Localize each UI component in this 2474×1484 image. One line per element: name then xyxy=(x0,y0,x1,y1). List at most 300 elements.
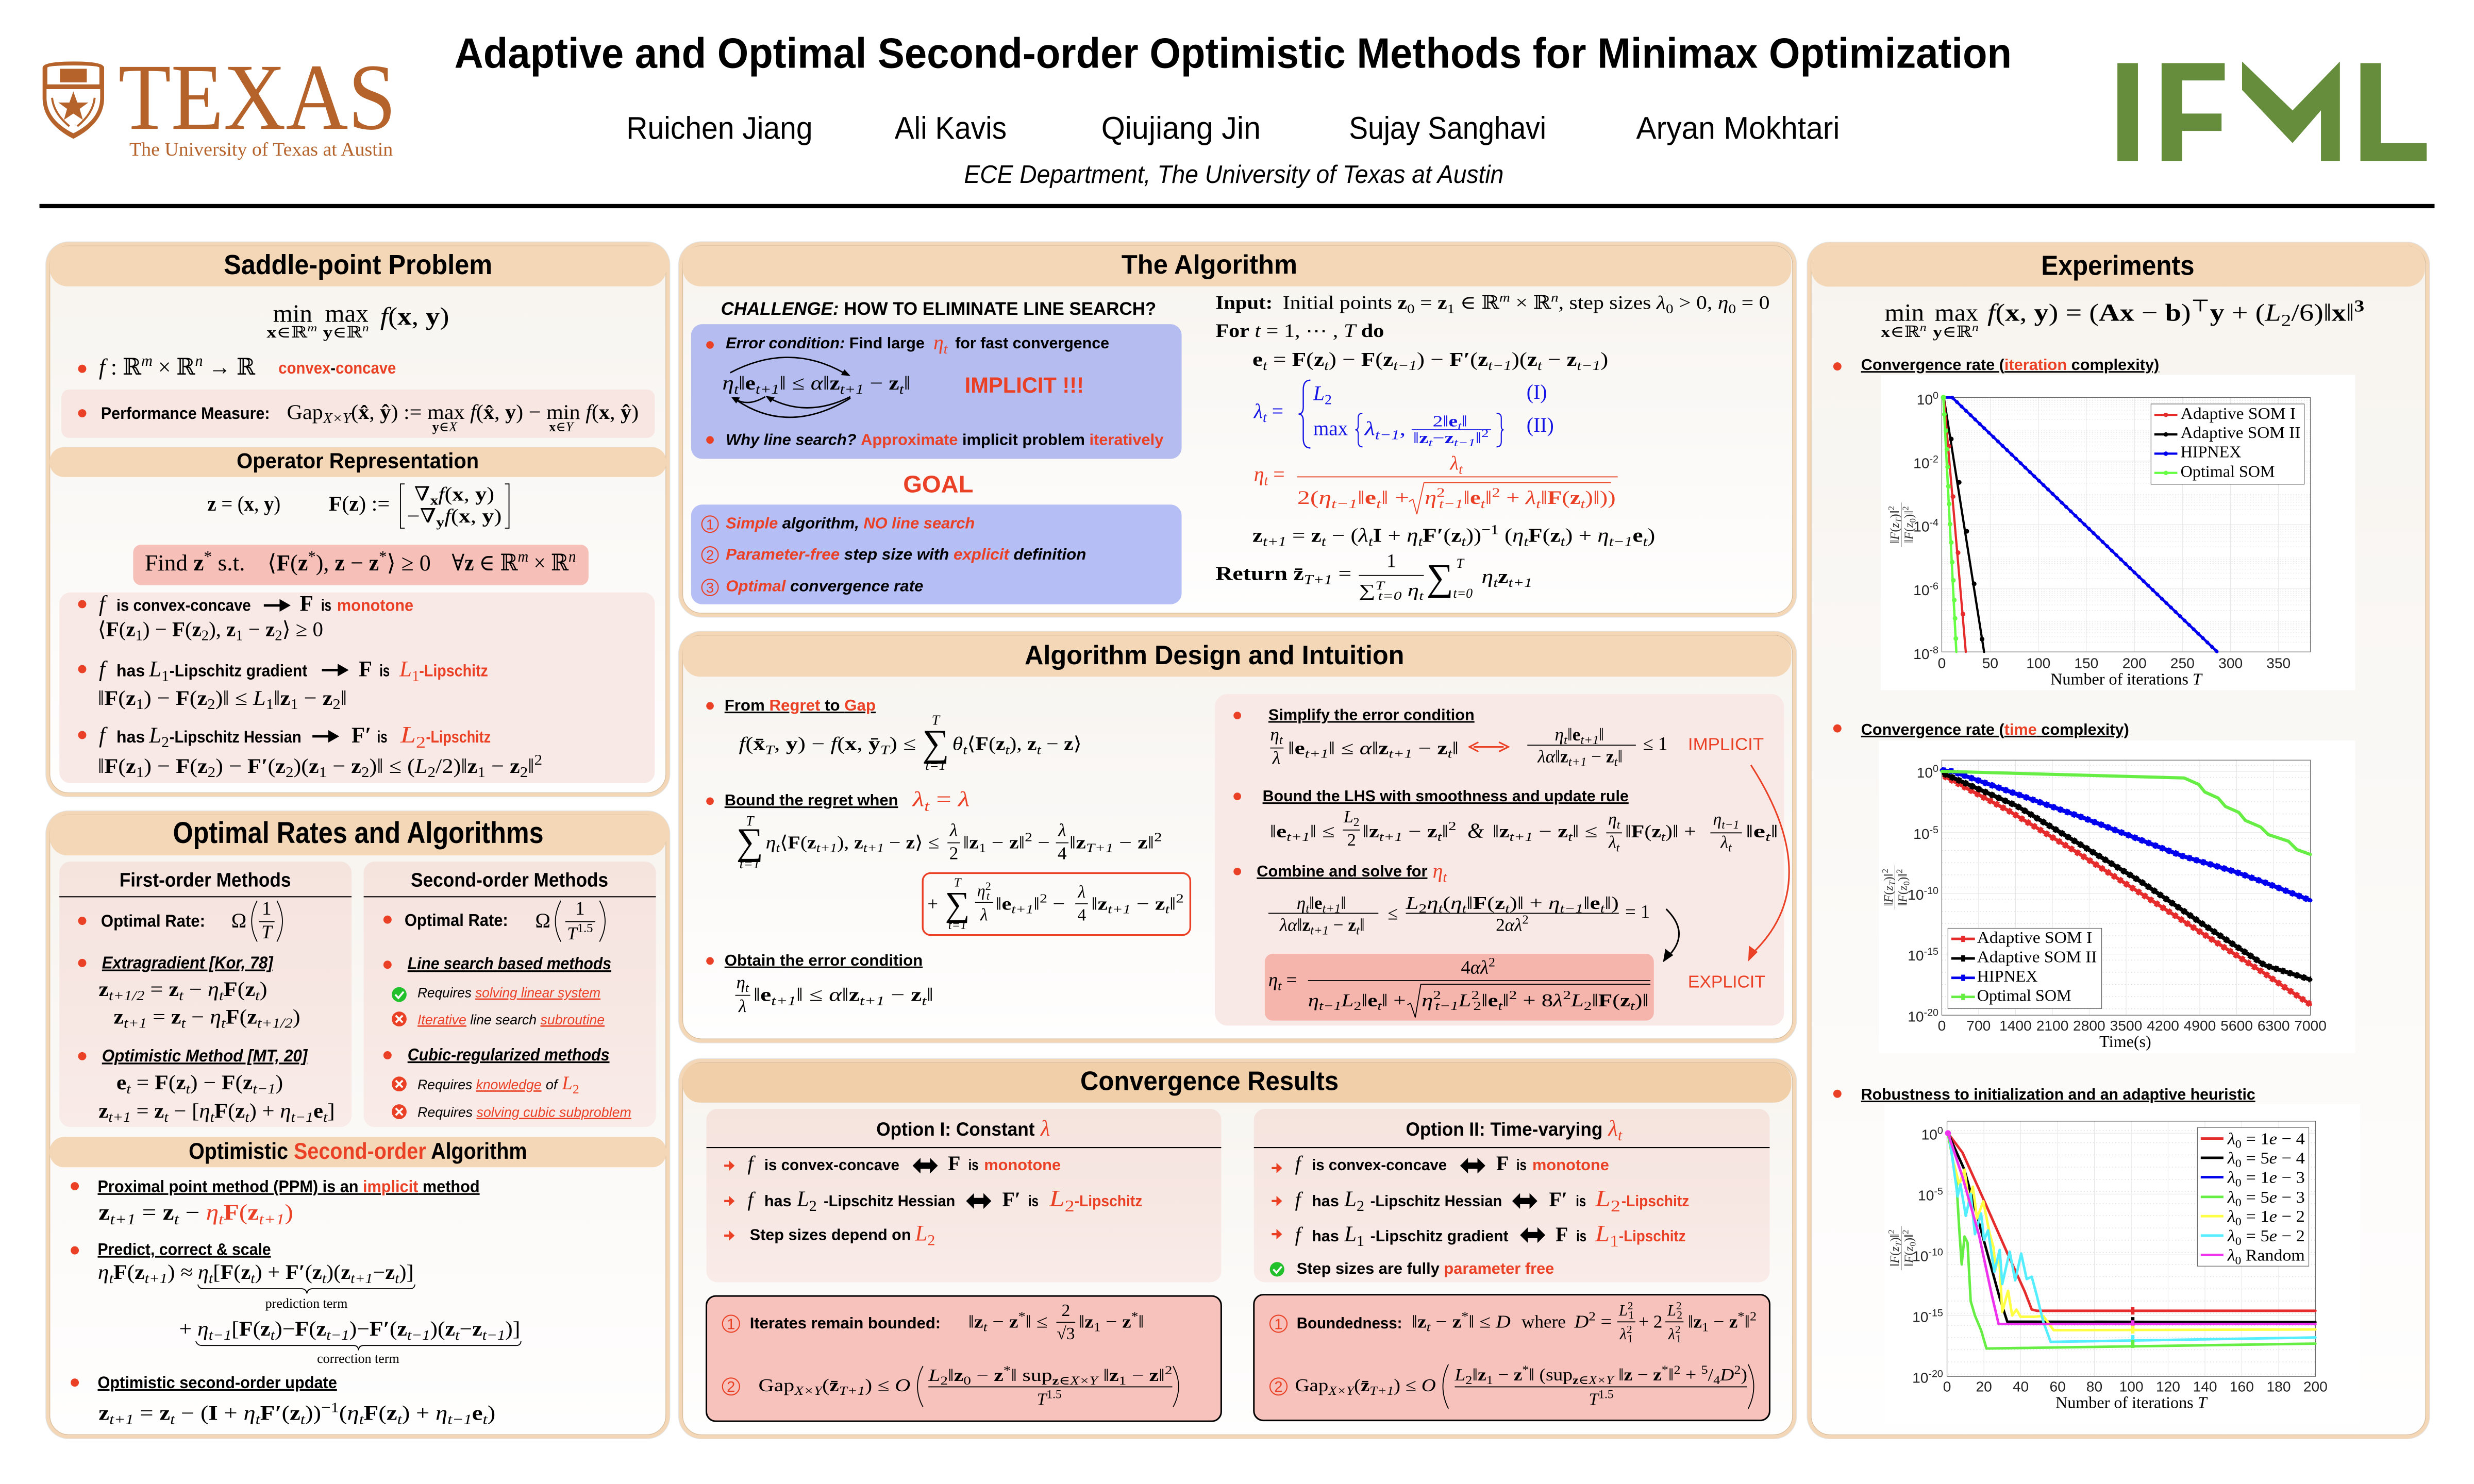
callout: red boxed sum: 4 xyxy=(1077,906,1086,925)
series: lambda0 Random xyxy=(1948,1133,2315,1324)
algorithm: return: ∑ Tt=0 η t xyxy=(1359,579,1425,603)
sub-panel: Second-order Methods: of xyxy=(546,1077,559,1092)
box: Option II results: ‖z1 − z*‖2 xyxy=(1688,1310,1757,1335)
step: combine and solve: ηt‖et+1‖ xyxy=(1297,893,1346,916)
property: L1 Lipschitz gradient: L1 xyxy=(148,657,169,685)
algorithm: lambda_t cases: 2‖ e t‖ xyxy=(1433,412,1467,432)
property: monotone: F xyxy=(300,592,313,616)
step: combine and solve: L 2 η t( η t‖F ( z t)‖ + η t−1 ‖e t‖) xyxy=(1405,893,1619,916)
sub-panel: First-order Methods: Optimal Rate: xyxy=(101,912,205,931)
bullet: f mapping: convex-concave xyxy=(278,359,396,377)
item: predict correct and scale: ηt[F(zt) + F′(zt)(zt+1−zt)] xyxy=(198,1261,414,1287)
band: Algorithm Design heading xyxy=(683,635,1791,677)
algorithm: return: t=0 xyxy=(1453,586,1473,601)
panel: Optimal Rates and Algorithms xyxy=(48,813,668,1437)
chart: time complexity xyxy=(1879,740,2355,1053)
band: Experiments heading: Experiments xyxy=(2041,250,2195,281)
algorithm: return: T xyxy=(1457,556,1465,571)
panel: Algorithm Design and Intuition xyxy=(681,633,1795,1041)
box: Option I results xyxy=(707,1296,1221,1421)
box: error condition xyxy=(691,324,1182,459)
band: Saddle-point Problem heading xyxy=(50,246,666,286)
sub-panel: Option II: L 2 xyxy=(1595,1185,1620,1215)
formula: saddle point objective: f(x, y) xyxy=(380,302,449,330)
box: find z star xyxy=(133,545,589,585)
legend: λ0 = 1 e − 3 xyxy=(2227,1168,2305,1189)
property: L2 Lipschitz Hessian: has xyxy=(116,728,145,746)
bullet: iteration complexity: Convergence rate (iteration complexity) xyxy=(1861,356,2159,374)
series: Adaptive SOM I xyxy=(1944,397,1966,652)
box: Option II results: L21 xyxy=(1618,1300,1634,1321)
axis labels: 0 xyxy=(1938,1018,1946,1034)
algorithm: return: 1 xyxy=(1386,550,1396,571)
step: bound the LHS: λt xyxy=(1608,833,1620,854)
legend xyxy=(2151,404,2304,484)
axis labels: 0 xyxy=(1943,1378,1951,1394)
step: bound the LHS: ηt−1 xyxy=(1713,810,1739,832)
series: HIPNEX xyxy=(1942,397,2217,652)
box: Option I results: T1.5 xyxy=(1037,1388,1062,1409)
authors: Qiujiang Jin xyxy=(1101,110,1261,145)
formula: operator F: −∇ yf(x , y ) xyxy=(407,505,502,530)
property: L2 Lipschitz Hessian: is xyxy=(377,728,388,746)
legend: Optimal SOM xyxy=(1977,986,2071,1005)
series: lambda0 = 5e-3 xyxy=(1948,1133,2315,1348)
box: explicit eta_t formula: 4αλ2 xyxy=(1461,955,1495,978)
legend: λ0 = 1 e − 2 xyxy=(2227,1207,2305,1228)
axis labels: ‖F(z0)‖2 xyxy=(1900,1230,1918,1267)
axis labels: Number of iterations T xyxy=(2055,1393,2208,1411)
algorithm: lambda_t cases: ‖ z t− z t−1 ‖ 2 xyxy=(1413,427,1489,449)
algorithm: lambda_t cases: (II) xyxy=(1527,414,1554,436)
formula: operator F: z = (x, y) xyxy=(208,492,280,516)
box: Option I results: L 2 ‖z 0 − z * ‖ sup z ∈ X×Y ‖ z 1 − z ‖ 2 xyxy=(928,1364,1172,1388)
axis labels: 180 xyxy=(2267,1378,2291,1394)
box: Option I results: √3 xyxy=(1057,1324,1075,1343)
bullet: f mapping: f : ℝm × ℝn → ℝ xyxy=(99,351,256,380)
axis labels xyxy=(1886,1125,2328,1411)
box: Option II results: Boundedness: xyxy=(1297,1314,1402,1332)
step: bound the LHS: ‖e t+1 ‖ ≤ xyxy=(1270,821,1335,845)
algorithm: eta_t xyxy=(1254,453,1618,514)
sub-panel: Option I: f xyxy=(747,1188,756,1211)
axis labels: 100 xyxy=(1917,390,1938,408)
sub-panel: Option II: f xyxy=(1295,1188,1303,1211)
step: simplify the error condition: ηt‖et+1‖ xyxy=(1555,724,1604,748)
item: predict correct and scale: + ηt−1 [F(zt)− F(zt−1 )− F′ (zt−1 )(zt−zt−1 )] xyxy=(179,1318,520,1344)
property: L2 Lipschitz Hessian: -Lipschitz xyxy=(426,728,491,746)
axis labels: 3500 xyxy=(2110,1018,2142,1034)
sub-panel: Option II xyxy=(1254,1109,1769,1282)
formula: experiment objective: y ∈ℝ n xyxy=(1933,321,1979,341)
algorithm: eta_t: ηt = xyxy=(1254,463,1285,489)
formula: saddle point objective: x ∈ℝ m xyxy=(266,322,317,341)
item: proximal point method: Proximal point method (PPM) is an implicit method xyxy=(97,1177,480,1196)
step: simplify the error condition: ‖e t+1 ‖ ≤ α ‖z t+1 − z t‖ xyxy=(1288,738,1459,761)
step: from regret to gap xyxy=(706,697,1082,773)
step: bound the regret: ‖z 1 − z ‖2 − xyxy=(963,831,1050,855)
sub-panel: Option II: -Lipschitz gradient xyxy=(1370,1227,1509,1245)
property: monotone xyxy=(78,592,413,644)
axis labels: 0 xyxy=(1938,655,1946,671)
sub-panel: Option II: is xyxy=(1576,1192,1586,1210)
legend xyxy=(2197,1127,2309,1267)
box: Option II results: λ21 xyxy=(1619,1323,1633,1345)
sub-panel: Second-order Methods: 1 xyxy=(575,898,584,919)
axis labels: 10-6 xyxy=(1913,581,1938,598)
box: goals: 3 xyxy=(706,580,714,596)
legend: λ0 = 5 e − 3 xyxy=(2227,1188,2305,1209)
sub-panel: Option II: -Lipschitz xyxy=(1622,1192,1689,1210)
step: bound the regret xyxy=(706,787,1162,871)
logo: IFML xyxy=(2117,61,2427,161)
formula: saddle point objective xyxy=(266,299,449,341)
box: Option II results: L 2‖z1 − z*‖ (sup z∈ X×Y ‖z − z*‖2 + 5/4D 2) xyxy=(1454,1363,1747,1387)
sub-panel: Option I: is xyxy=(1028,1192,1039,1210)
axis labels: 10-8 xyxy=(1913,645,1938,662)
step: from regret to gap: From Regret to Gap xyxy=(725,697,876,714)
box: performance measure xyxy=(61,390,655,438)
axis labels: 50 xyxy=(1982,655,1998,671)
affiliation: ECE Department, The University of Texas at Austin xyxy=(964,161,1503,189)
sub-panel: Second-order Methods: Iterative line search subroutine xyxy=(417,1012,605,1027)
panel: Convergence Results xyxy=(681,1061,1795,1437)
panel: Experiments xyxy=(1809,244,2428,1437)
axis labels: 350 xyxy=(2266,655,2291,671)
property: L2 Lipschitz Hessian: L 2 xyxy=(400,721,426,751)
sub-panel: Second-order Methods: T1.5 xyxy=(567,921,593,943)
axis labels: 40 xyxy=(2013,1378,2029,1394)
box: Option II results: D 2 = xyxy=(1574,1310,1612,1332)
property: L1 Lipschitz gradient: f xyxy=(99,657,108,682)
sub-panel: First-order Methods: 1 xyxy=(262,898,272,919)
step: combine and solve: ≤ xyxy=(1388,903,1398,924)
chart: iteration complexity xyxy=(1881,375,2355,690)
step: combine and solve: = 1 xyxy=(1625,901,1650,922)
property: L1 Lipschitz gradient: ‖F(z1) − F(z2)‖ ≤ L1‖z1 − z2‖ xyxy=(98,686,347,713)
panel: The Algorithm xyxy=(681,244,1795,615)
band: Optimistic Second-order Algorithm: Optimistic Second-order Algorithm xyxy=(189,1139,527,1164)
algorithm: lambda_t cases: (I) xyxy=(1527,381,1547,403)
step: bound the regret: 4 xyxy=(1058,843,1067,863)
title: Adaptive and Optimal Second-order Optimistic Methods for Minimax Optimization xyxy=(455,29,2012,77)
sub-panel: Option II: F xyxy=(1496,1152,1509,1175)
step: from regret to gap: f(x̄ T , y ) − f(x , ȳ T ) ≤ xyxy=(739,733,916,757)
step: obtain error condition: ‖ e t+1 ‖ ≤ α ‖ z t+1 − z t‖ xyxy=(754,984,933,1008)
step: bound the LHS: λt xyxy=(1720,833,1732,854)
step: simplify the error condition: IMPLICIT xyxy=(1688,735,1764,754)
sub-panel: Option II: F xyxy=(1556,1223,1568,1246)
formula: experiment objective: min xyxy=(1885,299,1924,326)
legend: λ0 = 5 e − 2 xyxy=(2227,1226,2305,1247)
sub-panel: Option II: has xyxy=(1312,1192,1339,1210)
step: bound the LHS: ‖F (z t)‖ + xyxy=(1625,821,1696,845)
sub-panel: Option I: L2 xyxy=(796,1187,817,1215)
sub-panel: Option I: is convex-concave xyxy=(764,1156,899,1174)
band: Optimal Rates heading xyxy=(50,815,666,855)
arrow: black curved to explicit formula xyxy=(1663,909,1679,962)
legend: Optimal SOM xyxy=(2181,462,2275,480)
sub-panel: Option I: is xyxy=(968,1156,979,1174)
sub-panel: First-order Methods: T xyxy=(261,921,273,942)
sub-panel: First-order Methods xyxy=(59,862,352,1127)
axis labels: 100 xyxy=(2026,655,2050,671)
step: bound the LHS: ‖z t+1 − z t‖ ≤ xyxy=(1493,821,1597,845)
algorithm: lambda_t cases xyxy=(1253,380,1554,449)
sub-panel: Option II: F′ xyxy=(1549,1188,1567,1211)
sub-panel: Second-order Methods: Ω xyxy=(535,909,550,932)
sub-panel: Option I: monotone xyxy=(984,1156,1061,1174)
box: error condition: for fast convergence xyxy=(955,334,1109,352)
series: Optimal SOM xyxy=(1941,395,1958,652)
legend: Adaptive SOM II xyxy=(1977,947,2097,966)
axis labels: 700 xyxy=(1966,1018,1991,1034)
box: explicit eta_t formula xyxy=(1265,954,1654,1021)
sub-panel: Second-order Methods: Requires solving cubic subproblem xyxy=(417,1104,631,1120)
band: Operator Representation xyxy=(49,447,666,477)
sub-panel: Option I: -Lipschitz Hessian xyxy=(824,1192,955,1210)
step: combine and solve: 2αλ2 xyxy=(1496,913,1529,935)
legend: Adaptive SOM I xyxy=(2181,404,2296,423)
sub-panel: Option I: λ xyxy=(1040,1117,1050,1141)
box: goals: Optimal convergence rate xyxy=(726,577,923,595)
property: L2 Lipschitz Hessian xyxy=(78,721,542,781)
box: goals: 1 xyxy=(706,516,714,532)
box: error condition: Error condition: Find large xyxy=(726,334,925,352)
sub-panel: Second-order Methods: Cubic-regularized methods xyxy=(408,1045,610,1065)
algorithm: lambda_t cases: λt = xyxy=(1253,400,1283,426)
box: Option II results: Gap X×Y (z̄T+1 ) ≤ O xyxy=(1295,1375,1436,1398)
step: bound the regret: t=1 xyxy=(740,855,760,871)
axis labels: ‖F(z0)‖2 xyxy=(1900,506,1918,543)
axis labels: Number of iterations T xyxy=(2050,669,2203,688)
axis labels: 10-10 xyxy=(1908,885,1938,903)
step: bound the regret: λ xyxy=(949,820,958,840)
legend: λ0 Random xyxy=(2227,1246,2305,1267)
box: Option I results: Gap X×Y (z̄ T+1 ) ≤ O xyxy=(759,1375,910,1398)
step: bound the regret: T xyxy=(746,813,755,829)
box: performance measure: Performance Measure: xyxy=(101,404,270,423)
property: L2 Lipschitz Hessian: L2 xyxy=(148,723,169,751)
axis labels: ‖F(z0)‖2 xyxy=(1894,869,1912,906)
axis labels: 10-5 xyxy=(1918,1186,1943,1204)
band: Saddle-point Problem heading: Saddle-point Problem xyxy=(224,250,492,280)
sub-panel: Option I: -Lipschitz xyxy=(1075,1192,1142,1210)
chart: robustness xyxy=(1885,1104,2360,1424)
axis labels: 4900 xyxy=(2184,1018,2216,1034)
legend: Adaptive SOM II xyxy=(2181,423,2300,442)
axis labels: ‖F(zT)‖2 xyxy=(1886,1229,1903,1267)
sub-panel: Option II: Option II: Time-varying xyxy=(1406,1119,1602,1140)
bullet: f mapping xyxy=(78,351,396,380)
property: monotone: is xyxy=(321,596,331,615)
step: bound the regret: ∑ xyxy=(737,821,763,863)
axis labels: 10-15 xyxy=(1912,1307,1943,1325)
item: proximal point method xyxy=(71,1177,480,1228)
step: bound the LHS: ‖ e t ‖ xyxy=(1746,821,1778,845)
axis labels: 250 xyxy=(2170,655,2195,671)
sub-panel: Option II: L 1 xyxy=(1595,1220,1619,1250)
step: simplify the error condition xyxy=(1233,706,1764,769)
callout: red boxed sum: λ xyxy=(980,906,988,925)
axis labels: 20 xyxy=(1976,1378,1992,1394)
sub-panel: First-order Methods: Optimistic Method [MT, 20] xyxy=(102,1047,308,1066)
algorithm: input and loop xyxy=(1215,290,1769,341)
box: performance measure: x∈Y xyxy=(549,419,575,434)
axis labels: 120 xyxy=(2156,1378,2180,1394)
step: bound the regret: 2 xyxy=(949,843,958,863)
property: L1 Lipschitz gradient: -Lipschitz xyxy=(419,662,488,680)
axis labels: 100 xyxy=(2119,1378,2144,1394)
logo: University of Texas at Austin: TEXAS xyxy=(119,44,396,149)
box: error condition: ηt xyxy=(933,331,948,357)
formula: saddle point objective: max xyxy=(325,299,369,327)
sub-panel: First-order Methods: zt+1 = zt − [ ηtF(zt) + ηt−1et] xyxy=(98,1100,335,1125)
box: performance measure: Gap X×Y(x̂, ŷ) := max f(x̂, y) − min f(x, ŷ) xyxy=(287,400,639,427)
band: Experiments heading xyxy=(1811,246,2425,286)
axis labels xyxy=(1880,763,2327,1051)
algorithm: input and loop: For t = 1, ⋯ , T do xyxy=(1215,320,1384,341)
heading: goal: GOAL xyxy=(903,471,973,498)
legend: HIPNEX xyxy=(1977,967,2038,985)
series: lambda0 = 1e-4 xyxy=(1948,1133,2315,1311)
logo: University of Texas at Austin xyxy=(43,44,396,160)
property: L1 Lipschitz gradient: -Lipschitz gradient xyxy=(170,662,308,680)
box: performance measure: y∈X xyxy=(432,419,458,434)
box: explicit eta_t formula: η 2t−1 L 22 ‖e t‖ 2 + 8 λ 2 L 2 ‖F ( z t)‖ xyxy=(1422,989,1649,1013)
axis labels: 6300 xyxy=(2258,1018,2290,1034)
step: bound the regret: ‖z T+1 − z ‖ 2 xyxy=(1069,831,1162,855)
step: from regret to gap: ∑ xyxy=(922,722,949,764)
series: Adaptive SOM I xyxy=(1944,776,2311,1004)
sub-panel: Option I: Step sizes depend on xyxy=(750,1226,911,1244)
property: L1 Lipschitz gradient: F xyxy=(359,657,372,682)
step: combine and solve xyxy=(1233,860,1650,938)
step: simplify the error condition: λ xyxy=(1272,748,1280,768)
formula: experiment objective xyxy=(1881,296,2364,341)
box: goals xyxy=(691,504,1182,604)
logo: University of Texas at Austin: The University of Texas at Austin xyxy=(129,139,393,160)
authors: Aryan Mokhtari xyxy=(1636,110,1840,145)
property: monotone: ⟨F(z1) − F(z2), z1 − z2⟩ ≥ 0 xyxy=(98,617,323,644)
callout: red boxed sum: t=1 xyxy=(948,918,966,932)
property: L1 Lipschitz gradient xyxy=(78,657,488,713)
sub-panel: First-order Methods: zt+1/2 = zt − ηtF(zt) xyxy=(98,978,268,1004)
sub-panel: Second-order Methods: Requires solving linear system xyxy=(417,985,600,1001)
item: predict correct and scale: correction term xyxy=(317,1351,399,1366)
algorithm: update: z t+1 = z t − ( λ tI + η tF′ (z t)) −1 ( η tF (z t) + η t−1 e t) xyxy=(1252,522,1655,549)
box: Option I results: 2 xyxy=(1061,1301,1070,1320)
step: bound the LHS: 2 xyxy=(1347,831,1356,850)
axis labels xyxy=(1886,390,2291,688)
step: from regret to gap: θ t⟨F(z t), z t − z⟩ xyxy=(952,733,1082,757)
formula: operator F xyxy=(208,483,509,530)
sub-panel: Option I: F xyxy=(948,1152,960,1175)
legend xyxy=(1948,928,2102,1008)
step: bound the regret: η t⟨F(z t+1 ), zt+1 − z⟩ ≤ xyxy=(766,832,939,855)
box: Option II results: L22 xyxy=(1667,1300,1682,1321)
sub-panel: Option II: L2 xyxy=(1344,1187,1364,1215)
box: goals: 2 xyxy=(706,547,714,563)
series: lambda0 = 1e-2 xyxy=(1954,1165,2315,1330)
box: Option II results: 2 xyxy=(1274,1379,1283,1395)
box: Option I results: ‖z1 − z*‖ xyxy=(1079,1310,1144,1335)
property: monotone: is convex-concave xyxy=(116,596,251,615)
sub-panel: Option I xyxy=(707,1109,1221,1282)
band: The Algorithm heading: The Algorithm xyxy=(1122,250,1297,280)
authors: Ruichen Jiang xyxy=(626,110,813,145)
band: Optimal Rates heading: Optimal Rates and Algorithms xyxy=(173,816,544,850)
step: bound the LHS: L2 xyxy=(1343,807,1359,829)
callout: red boxed sum: + xyxy=(927,893,938,914)
box: find z star: ⟨F(z*), z − z*⟩ ≥ 0 xyxy=(268,547,431,576)
algorithm: input and loop: Input: xyxy=(1215,292,1273,313)
band: The Algorithm heading xyxy=(683,246,1791,286)
property: L2 Lipschitz Hessian: f xyxy=(99,723,108,748)
axis labels: 100 xyxy=(1917,763,1938,781)
property: monotone: monotone xyxy=(337,596,413,615)
step: simplify the error condition: Simplify the error condition xyxy=(1268,706,1475,723)
axis labels: 4200 xyxy=(2147,1018,2179,1034)
axis labels: 7000 xyxy=(2294,1018,2327,1034)
legend: λ0 = 1 e − 4 xyxy=(2227,1129,2305,1150)
formula: experiment objective: f(x , y ) = ( Ax − b ) ⊤ y + ( L 2/6)‖ x ‖3 xyxy=(1987,296,2364,330)
sub-panel: Option I: Option I: Constant xyxy=(876,1119,1035,1140)
axis labels: 10-20 xyxy=(1908,1007,1938,1024)
sub-panel: Option II: is convex-concave xyxy=(1312,1156,1447,1174)
series: Adaptive SOM II xyxy=(1944,397,1984,652)
step: bound the LHS: Bound the LHS with smoothness and update rule xyxy=(1263,787,1629,805)
authors xyxy=(626,110,1840,145)
authors: Sujay Sanghavi xyxy=(1349,110,1546,145)
step: bound the regret: Bound the regret when xyxy=(725,791,898,809)
box: Option II results xyxy=(1254,1295,1769,1421)
sub-panel: Option II: is xyxy=(1576,1227,1586,1245)
bullet: robustness: Robustness to initialization and an adaptive heuristic xyxy=(1861,1086,2255,1103)
bullet: time complexity: Convergence rate (time complexity) xyxy=(1861,721,2129,738)
property: L2 Lipschitz Hessian: -Lipschitz Hessian xyxy=(170,728,302,746)
band: Convergence Results heading: Convergence Results xyxy=(1080,1066,1339,1096)
sub-panel: Second-order Methods: Line search based methods xyxy=(408,954,611,973)
item: predict correct and scale: prediction term xyxy=(265,1296,347,1311)
algorithm: eta_t: λt xyxy=(1450,453,1463,477)
algorithm: lambda_t cases: L2 xyxy=(1313,382,1332,408)
sub-panel: First-order Methods: et = F(zt) − F(zt−1 ) xyxy=(116,1071,283,1097)
box: find z star: ∀z ∈ ℝm × ℝn xyxy=(452,547,576,576)
box: goals: Simple algorithm, NO line search xyxy=(726,515,975,532)
step: bound the LHS: & xyxy=(1467,819,1484,842)
axis labels: 60 xyxy=(2049,1378,2066,1394)
axis labels: 10-20 xyxy=(1912,1369,1943,1386)
heading: challenge: CHALLENGE: HOW TO ELIMINATE LINE SEARCH? xyxy=(721,299,1156,319)
formula: operator F: ∇ xf(x , y ) xyxy=(414,483,494,508)
box: Option I results: 2 xyxy=(727,1379,735,1395)
band: Operator Representation: Operator Representation xyxy=(237,449,479,473)
sub-panel: Option II: f xyxy=(1295,1223,1303,1246)
sub-panel: Option I: L2 xyxy=(915,1222,935,1249)
property: L2 Lipschitz Hessian: ‖F(z1) − F(z2) − F′ (z2)(z1 − z2)‖ ≤ ( L2/2)‖ z1 − z2‖2 xyxy=(98,752,542,781)
axis labels: 10-2 xyxy=(1913,454,1938,471)
axis labels: 10-4 xyxy=(1913,517,1938,535)
callout: red boxed sum: T xyxy=(954,875,962,889)
algorithm: return: ∑ xyxy=(1426,556,1453,598)
sub-panel: Option I: F′ xyxy=(1002,1188,1021,1211)
algorithm: e_t: e t = F (z t) − F (z t−1 ) − F′ (z t−1 )( z t − z t−1 ) xyxy=(1252,349,1608,373)
axis labels: 150 xyxy=(2074,655,2098,671)
sub-panel: Option I: f xyxy=(747,1152,756,1175)
sub-panel: Second-order Methods: Second-order Methods xyxy=(411,869,608,891)
series: Adaptive SOM II xyxy=(1944,774,2311,980)
